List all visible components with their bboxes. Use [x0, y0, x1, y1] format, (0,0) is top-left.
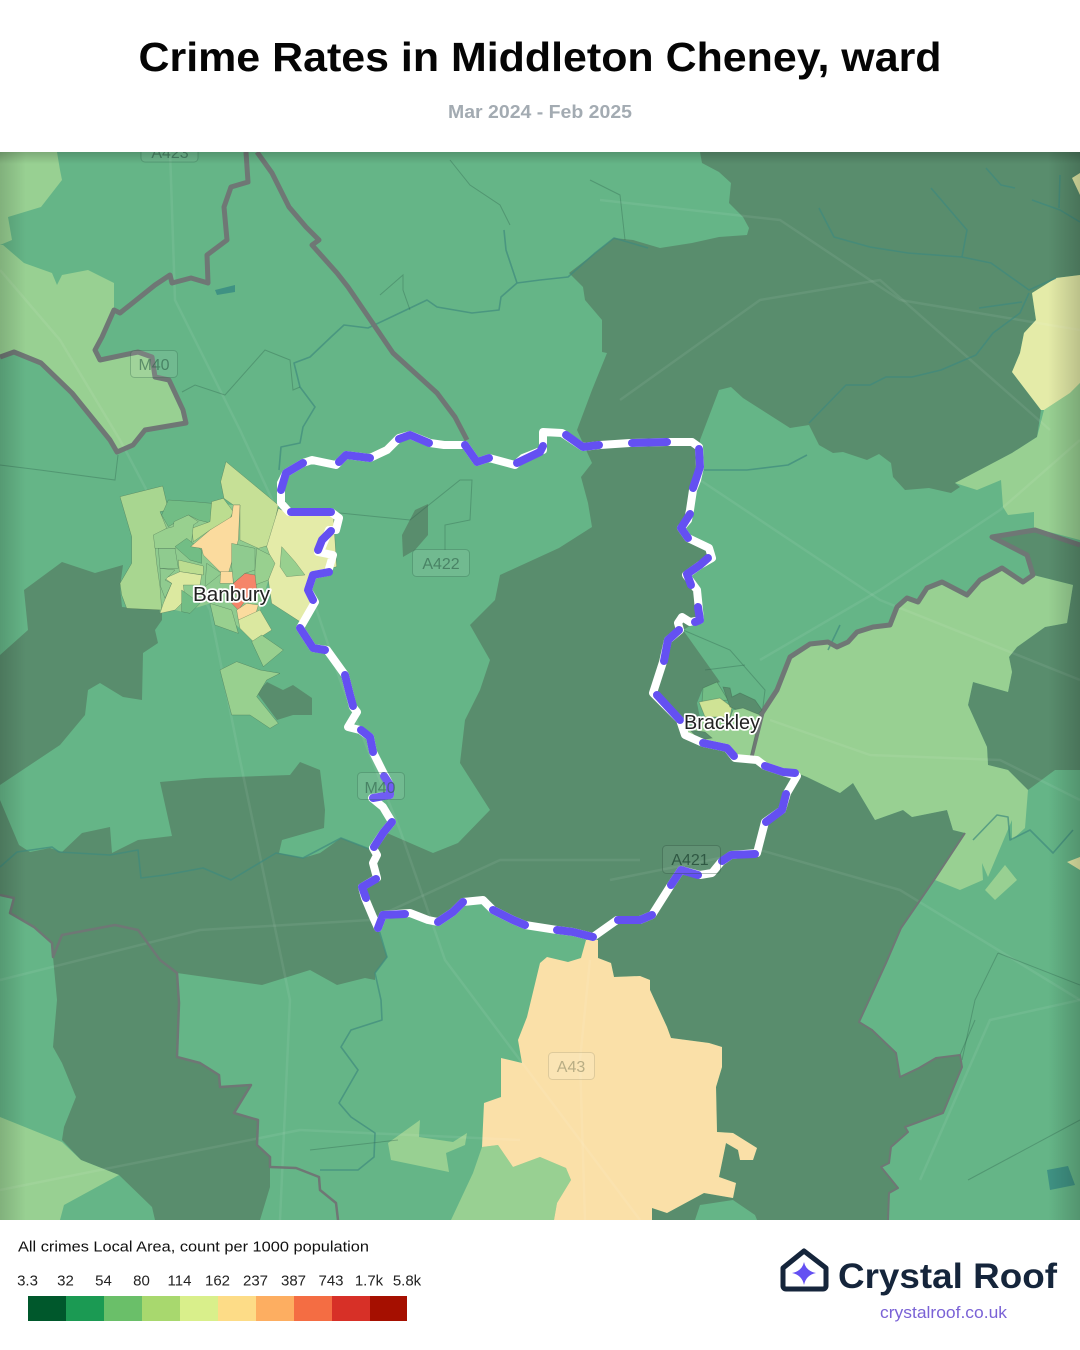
- rivers: [0, 168, 1080, 1170]
- legend scale labels: 54: [95, 1272, 112, 1290]
- legend colour bar: [28, 1296, 407, 1321]
- Crystal Roof logo: [783, 1251, 1057, 1322]
- region: tan higher-crime area: [482, 940, 757, 1220]
- legend scale labels: 3.3: [17, 1272, 38, 1290]
- shield: A43: [548, 1052, 594, 1080]
- region: small dark patch south of Banbury: [257, 682, 312, 720]
- legend scale labels: [17, 1272, 422, 1290]
- water bodies: [215, 285, 1075, 1190]
- road shields: [130, 140, 720, 1080]
- legend scale labels: 743: [318, 1272, 344, 1290]
- icon: house with star: [783, 1251, 826, 1289]
- map edge vignette: [0, 152, 1080, 1220]
- shield: A43: A43: [557, 1059, 585, 1076]
- shield: M40 south: [358, 772, 404, 800]
- map panel: [0, 140, 1080, 1220]
- thin ward boundaries: [0, 160, 1080, 1180]
- place label: Banbury: Banbury: [193, 584, 270, 606]
- region: light green areas: [0, 152, 1080, 1220]
- region: dark east edge area: [968, 530, 1080, 790]
- shield: A421: A421: [671, 852, 709, 869]
- shield: M40 south: M40: [364, 780, 396, 797]
- legend scale labels: 32: [57, 1272, 74, 1290]
- legend: [17, 1238, 422, 1321]
- gray district boundary: south-west: [0, 895, 338, 1220]
- gray district boundary: north: [0, 152, 248, 452]
- website link: crystalroof.co.uk: [880, 1304, 1008, 1322]
- shield: A423: [140, 152, 198, 162]
- Brackley town wards: [683, 682, 762, 757]
- shield: A422: A422: [422, 556, 460, 573]
- shield: M40 north: M40: [138, 357, 170, 374]
- logo wordmark: Crystal Roof: [838, 1257, 1057, 1296]
- legend scale labels: 237: [243, 1272, 268, 1290]
- shield: A422: [412, 550, 470, 576]
- Banbury town wards: [120, 462, 337, 728]
- legend scale labels: 114: [168, 1272, 191, 1290]
- shield: M40 north: [130, 350, 178, 378]
- gray district boundary: south-east: [859, 833, 965, 1220]
- legend scale labels: 5.8k: [393, 1272, 422, 1290]
- shield: A421: [662, 846, 720, 874]
- legend scale labels: 80: [133, 1272, 150, 1290]
- ward boundary: white base line: [281, 432, 797, 937]
- title: Crime Rates in Middleton Cheney, ward: [138, 34, 942, 80]
- road network: [0, 150, 1080, 1220]
- region: pale yellow-green areas: [1012, 173, 1080, 870]
- gray district boundary: north-east diagonal: [257, 152, 467, 440]
- shield: A423: A423: [151, 145, 189, 162]
- ward boundary: purple dashes: [281, 435, 795, 937]
- gray district boundary: east: [751, 530, 1080, 757]
- legend scale labels: 1.7k: [355, 1272, 384, 1290]
- legend title: All crimes Local Area, count per 1000 population: [18, 1238, 369, 1256]
- legend scale labels: 162: [205, 1272, 230, 1290]
- region: dark area west of Banbury: [0, 562, 162, 785]
- region: small dark patch in ward: [402, 504, 428, 557]
- date range subtitle: Mar 2024 - Feb 2025: [448, 102, 632, 122]
- place label: Brackley: Brackley: [684, 712, 760, 734]
- region: dark low-crime areas: [0, 152, 1080, 1220]
- region: mid green patch below tan area: [695, 1200, 757, 1220]
- legend scale labels: 387: [281, 1272, 306, 1290]
